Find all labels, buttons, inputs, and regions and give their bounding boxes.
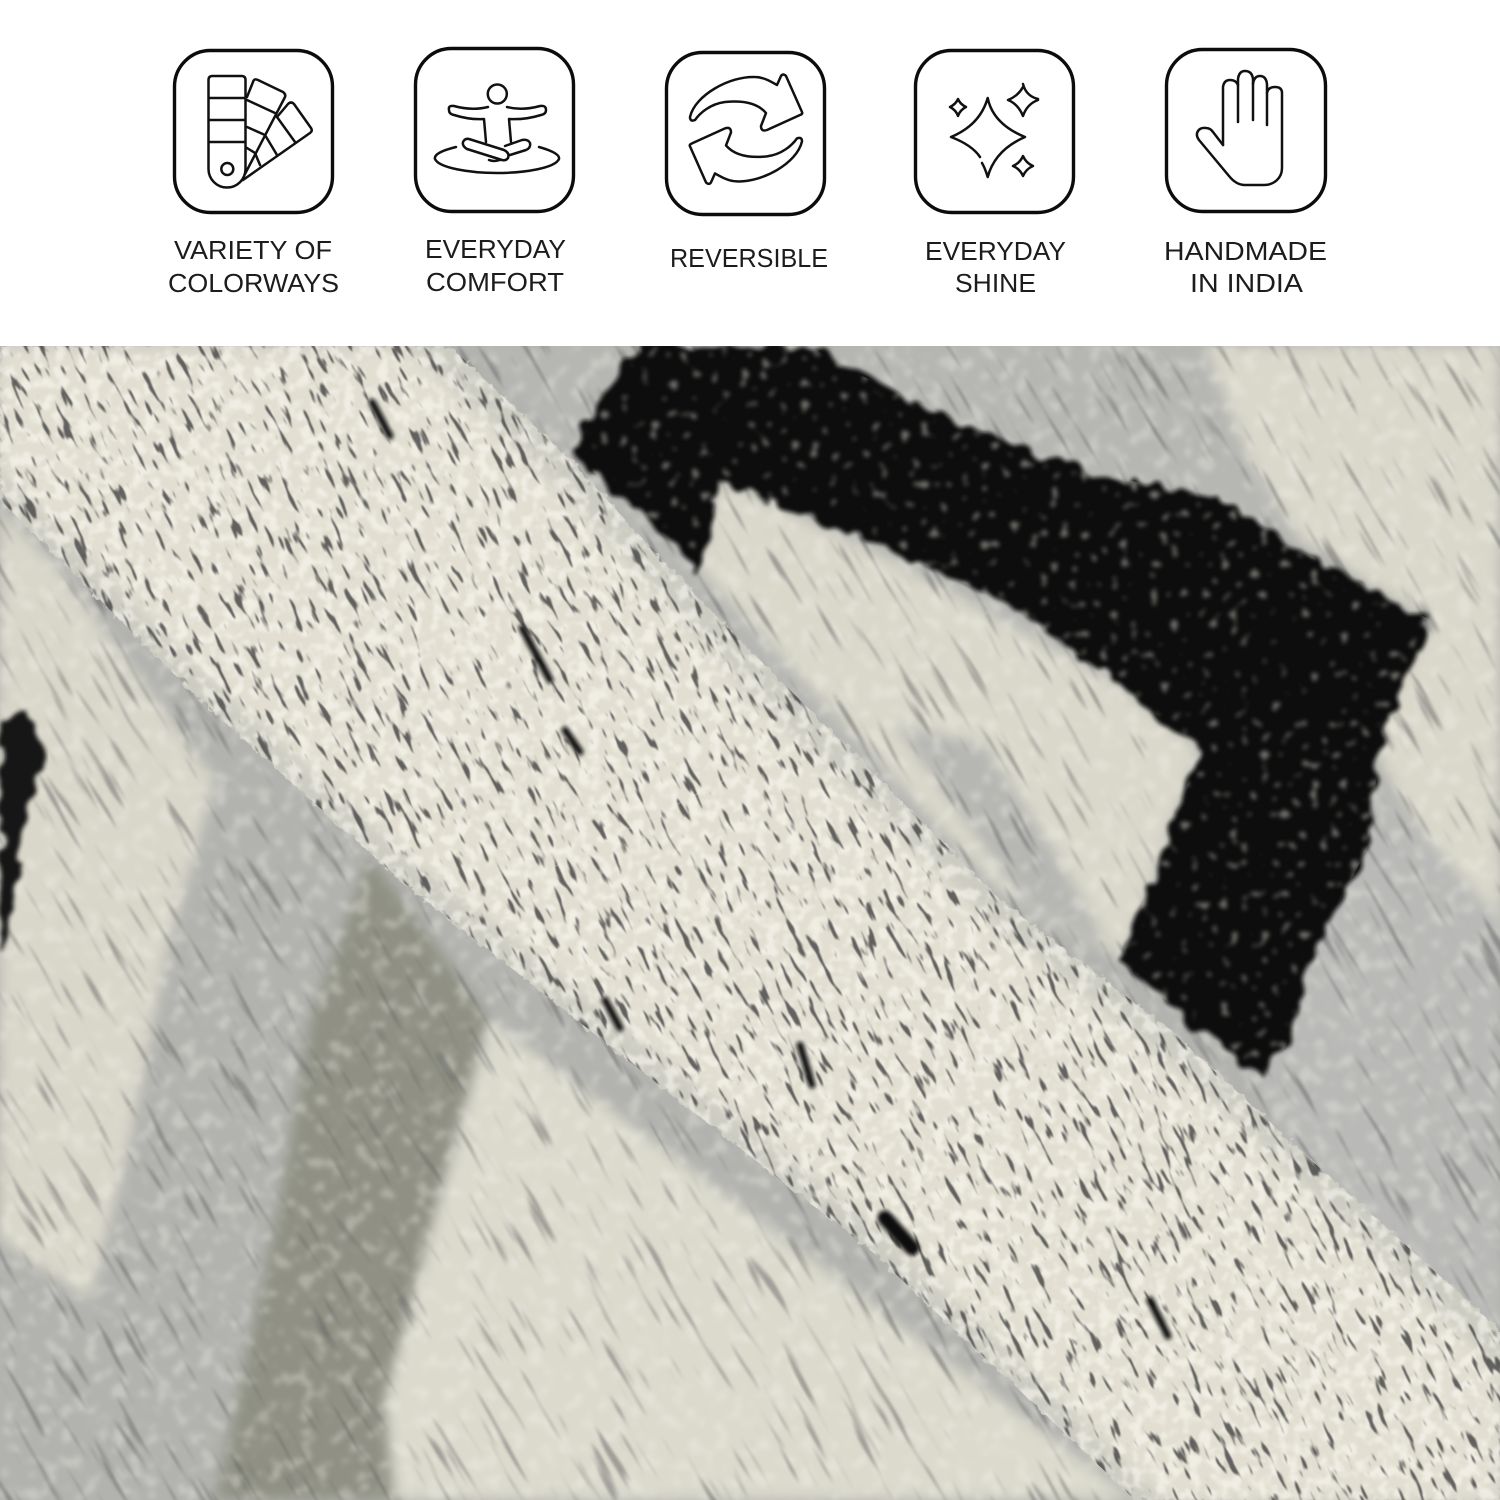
label: IN INDIA xyxy=(1190,268,1304,298)
feature: everyday comfort xyxy=(416,48,574,297)
icon: reversible arrows xyxy=(666,52,824,214)
icon: meditating figure xyxy=(416,48,574,212)
label: EVERYDAY xyxy=(425,234,566,264)
rolled rug: prominent dark flecks xyxy=(372,402,1168,1336)
icon: hand xyxy=(1166,50,1326,212)
label: REVERSIBLE xyxy=(670,243,828,273)
label: COLORWAYS xyxy=(168,268,339,298)
rug background: cream lower field xyxy=(385,1020,1135,1500)
label: SHINE xyxy=(955,268,1036,298)
rug background: soft mottled wool xyxy=(0,346,1500,1500)
feature: reversible xyxy=(666,52,828,273)
rug background: cream inside chevron xyxy=(700,480,1200,960)
rug background: fine streaks xyxy=(0,346,1500,1500)
label: HANDMADE xyxy=(1164,236,1327,266)
rug background: black motif at left edge xyxy=(0,708,46,950)
feature: handmade in india xyxy=(1164,50,1327,298)
rug background: upper right grey field xyxy=(480,346,1290,900)
rug background: black motif woven dots xyxy=(560,346,1440,1086)
label: VARIETY OF xyxy=(174,235,332,265)
rug background: cream left field xyxy=(0,510,215,1300)
label: EVERYDAY xyxy=(925,236,1066,266)
feature: variety of colorways xyxy=(168,50,339,298)
label xyxy=(925,236,1066,298)
rolled rug xyxy=(0,346,1500,1500)
label xyxy=(168,235,339,298)
icon: colour swatch fan xyxy=(174,50,332,212)
label xyxy=(1164,236,1327,298)
photo: close-up of rolled rug xyxy=(0,346,1500,1500)
rug background: black chevron motif xyxy=(570,346,1430,1080)
label xyxy=(425,234,566,297)
rug background: cream area top right xyxy=(1205,346,1500,940)
rug background: grey patch inside chevron xyxy=(895,725,1110,950)
rug background: grey lower right xyxy=(1386,811,1498,1308)
label: COMFORT xyxy=(426,267,564,297)
rug background: olive grey wedge xyxy=(215,855,490,1500)
icon: sparkles xyxy=(916,50,1074,212)
feature: everyday shine xyxy=(916,50,1074,298)
